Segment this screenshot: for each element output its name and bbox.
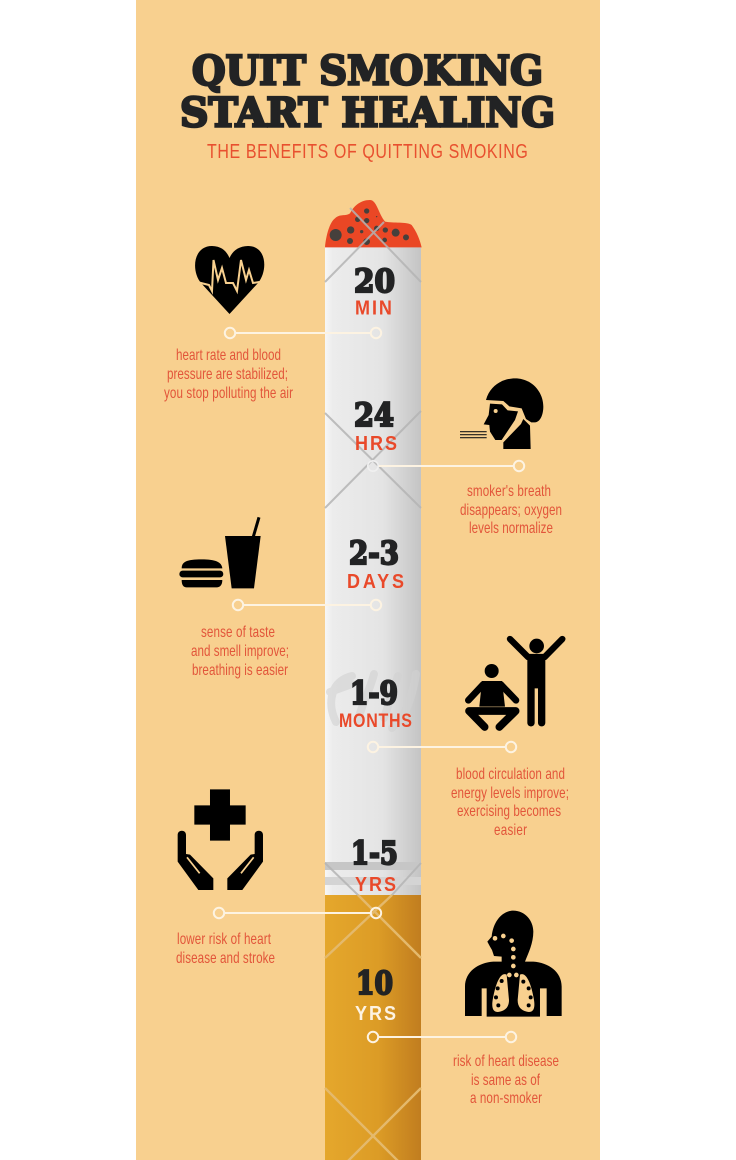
- description: [191, 623, 289, 678]
- ember: [325, 200, 422, 247]
- connector: [368, 461, 524, 471]
- description: [451, 765, 569, 838]
- description: risk of heart disease: [453, 1052, 559, 1069]
- connector: [225, 328, 381, 338]
- title: START HEALING: [180, 90, 555, 136]
- description: a non-smoker: [470, 1089, 542, 1106]
- description: smoker's breath: [467, 482, 551, 499]
- description: [176, 930, 275, 966]
- icon: head breathing: [460, 378, 543, 449]
- cigarette filter: [325, 895, 421, 1160]
- description: sense of taste: [201, 623, 275, 640]
- description: lower risk of heart: [177, 930, 271, 947]
- connector: [233, 600, 381, 610]
- time value: 10: [356, 964, 393, 1002]
- time unit: HRS: [355, 433, 397, 455]
- icon: burger and drink: [179, 517, 261, 588]
- subtitle: THE BENEFITS OF QUITTING SMOKING: [207, 140, 528, 162]
- description: is same as of: [471, 1071, 540, 1088]
- connector: [368, 742, 516, 752]
- time value: 1-5: [351, 834, 398, 872]
- cigarette paper: [325, 247, 421, 895]
- icon: heart with pulse: [195, 246, 265, 314]
- description: disease and stroke: [176, 949, 275, 966]
- description: and smell improve;: [191, 642, 289, 659]
- description: exercising becomes: [457, 802, 561, 819]
- paper crease lines: [325, 208, 421, 895]
- time unit: DAYS: [347, 571, 404, 593]
- time value: 20: [354, 262, 395, 300]
- time value: 1-9: [350, 674, 398, 712]
- time unit: YRS: [355, 874, 396, 896]
- description: pressure are stabilized;: [167, 365, 288, 382]
- connector: [214, 908, 381, 918]
- time unit: MONTHS: [339, 710, 412, 731]
- background panel: [136, 0, 600, 1160]
- cigarette: [325, 200, 422, 1160]
- step 4: 1-9 months: [339, 639, 569, 838]
- time value: 2-3: [349, 534, 399, 572]
- step 5: 1-5 yrs: [176, 789, 398, 966]
- step 3: 2-3 days: [179, 517, 404, 678]
- time unit: MIN: [355, 298, 392, 320]
- step 2: 24 hrs: [354, 378, 562, 536]
- description: [453, 1052, 559, 1106]
- connector: [368, 1032, 516, 1042]
- description: levels normalize: [469, 519, 553, 536]
- scribble on paper: [330, 674, 416, 728]
- icon: hands and medical cross: [178, 789, 263, 890]
- title: [180, 48, 555, 136]
- title: QUIT SMOKING: [192, 48, 543, 94]
- description: energy levels improve;: [451, 784, 569, 801]
- time value: 24: [354, 396, 394, 434]
- icon: exercising figures: [468, 639, 562, 727]
- description: disappears; oxygen: [460, 501, 562, 518]
- description: heart rate and blood: [176, 346, 281, 363]
- description: you stop polluting the air: [164, 384, 293, 401]
- step 6: 10 yrs: [355, 911, 562, 1106]
- description: blood circulation and: [456, 765, 565, 782]
- icon: body with lungs: [465, 911, 562, 1017]
- description: [460, 482, 562, 536]
- step 1: 20 min: [164, 246, 395, 401]
- description: breathing is easier: [192, 661, 288, 678]
- time unit: YRS: [355, 1003, 396, 1025]
- description: easier: [494, 821, 527, 838]
- filter bands: [325, 862, 421, 885]
- description: [164, 346, 293, 401]
- filter crease lines: [325, 895, 421, 1160]
